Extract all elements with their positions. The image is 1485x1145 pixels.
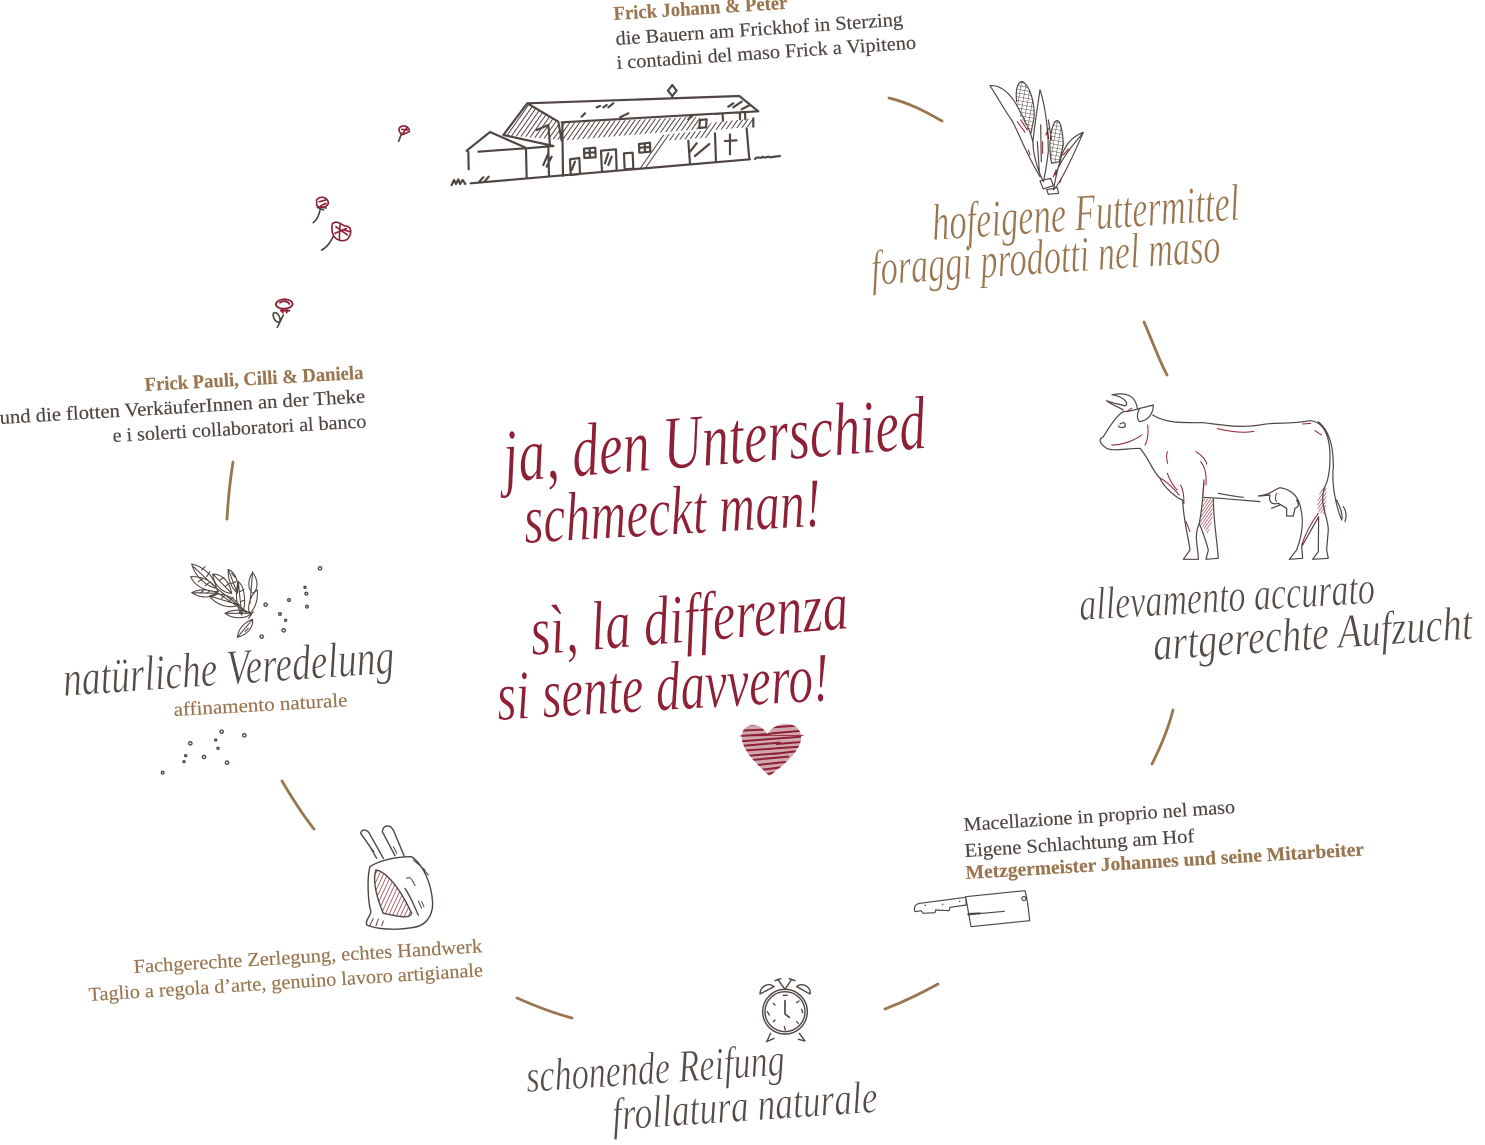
- text: Macellazione: Metzgermeister Johannes und seine Mitarbeiter: [965, 839, 1365, 884]
- tagline: hofeigene Futtermittel: [869, 175, 1241, 296]
- icon: cleaver: [914, 891, 1030, 927]
- headline: si, la differenza si sente davvero: si sente davvero!: [494, 639, 831, 736]
- text: Fachgerechte Zerlegung: [88, 936, 484, 1006]
- text: Frick Pauli, Cilli & Daniela: und die flotten VerkäuferInnen an der Theke: [0, 386, 366, 429]
- text: Frick Pauli, Cilli & Daniela: Frick Pauli, Cilli & Daniela: [144, 363, 364, 396]
- icon: cow: [1100, 394, 1346, 559]
- arrow: cow to butchery: [1152, 710, 1173, 764]
- tagline: natuerliche Veredelung: affinamento naturale: [173, 690, 348, 721]
- arrow: refinement to sales: [227, 462, 233, 519]
- arrow: fodder to cow: [1144, 322, 1167, 375]
- tagline: allevamento accurato: [1078, 562, 1475, 671]
- icon: farmhouse: [452, 85, 780, 185]
- icon: bay leaves: [191, 564, 258, 637]
- tagline: hofeigene Futtermittel: hofeigene Futtermittel: [930, 175, 1241, 252]
- text: Fachgerechte Zerlegung: Fachgerechte Zerlegung, echtes Handwerk: [133, 936, 483, 978]
- arrow: cutting to refinement: [282, 781, 314, 829]
- decoration: spice dots: [161, 567, 322, 774]
- text: Frick Johann & Peter: die Bauern am Frickhof in Sterzing: [615, 9, 904, 50]
- text: Frick Johann & Peter: [613, 0, 917, 74]
- headline: ja, den Unterschied schmeckt man: [493, 381, 930, 559]
- arrow: butchery to ripening: [885, 984, 938, 1009]
- tagline: natuerliche Veredelung: [61, 628, 396, 721]
- headline: si, la differenza si sente davvero: [494, 568, 851, 736]
- icon: corn cobs: [990, 82, 1083, 194]
- icon: flowers: [273, 126, 409, 327]
- text: Frick Johann & Peter: i contadini del maso Frick a Vipiteno: [616, 33, 917, 74]
- text: Macellazione: [963, 797, 1365, 884]
- text: Frick Pauli, Cilli & Daniela: [0, 363, 367, 447]
- icon: scribbled heart: [739, 723, 803, 776]
- icon: rib cut: [361, 826, 433, 929]
- headline: ja, den Unterschied schmeckt man: schmeckt man!: [521, 465, 823, 559]
- text: Fachgerechte Zerlegung: Taglio a regola d’arte, genuino lavoro artigianale: [88, 960, 484, 1006]
- text: Macellazione: Macellazione in proprio nel maso: [963, 797, 1236, 836]
- arrow: farmhouse to fodder: [889, 98, 942, 121]
- tagline: natuerliche Veredelung: natürliche Veredelung: [61, 628, 396, 707]
- arrow: ripening to cutting: [517, 998, 572, 1018]
- headline: ja, den Unterschied schmeckt man: ja, den Unterschied: [493, 381, 930, 499]
- headline: si, la differenza si sente davvero: sì, la differenza: [527, 568, 851, 671]
- tagline: allevamento accurato: allevamento accurato: [1078, 562, 1376, 630]
- tagline: schonende Reifung: [524, 1034, 879, 1140]
- text: Frick Pauli, Cilli & Daniela: e i solerti collaboratori al banco: [112, 411, 367, 447]
- tagline: schonende Reifung: frollatura naturale: [610, 1071, 879, 1140]
- tagline: schonende Reifung: schonende Reifung: [524, 1034, 786, 1102]
- text: Macellazione: Eigene Schlachtung am Hof: [964, 826, 1195, 862]
- tagline: hofeigene Futtermittel: foraggi prodotti nel maso: [869, 217, 1222, 296]
- icon: alarm clock: [760, 979, 810, 1042]
